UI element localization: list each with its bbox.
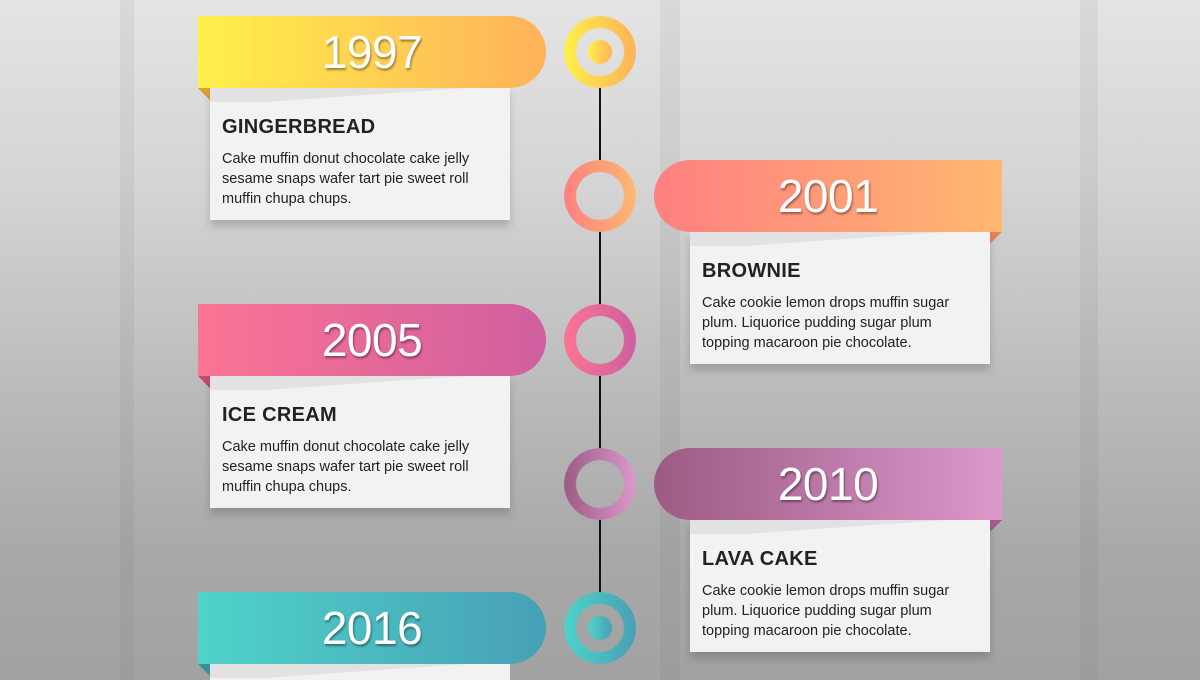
item 2010 [564,448,1002,660]
band: 2010: 2010 [778,458,878,510]
card: gingerbread: GINGERBREAD [222,116,375,138]
circle marker 1997 [564,16,636,88]
card: brownie [690,232,990,364]
band: 2001: 2001 [778,170,878,222]
card: ice cream: Cake muffin donut chocolate cake jelly sesame snaps wafer tart pie sweet roll muffin chupa chups. [222,439,469,495]
card: gingerbread: Cake muffin donut chocolate cake jelly sesame snaps wafer tart pie sweet roll muffin chupa chups. [222,151,469,207]
card: brownie: Cake cookie lemon drops muffin sugar plum. Liquorice pudding sugar plum topping macaroon pie chocolate. [702,295,949,351]
card: lava cake [690,520,990,652]
item 2005 [198,304,636,517]
circle marker 2010 [564,448,636,520]
card: lava cake: LAVA CAKE [702,548,818,570]
item 2001 [564,160,1002,373]
circle marker 2001 [564,160,636,232]
card: 2016 (cut off) [210,664,510,680]
band: 2001 [654,160,1002,232]
card: ice cream [210,376,510,508]
band: 1997 [198,16,546,88]
card: ice cream: ICE CREAM [222,404,337,426]
item 1997 [198,16,636,230]
card: brownie: BROWNIE [702,260,801,282]
band: 2010 [654,448,1002,520]
band: 2005 [198,304,546,376]
circle marker 2016 [564,592,636,664]
band: 2016: 2016 [322,602,422,654]
band: 1997: 1997 [322,26,422,78]
circle marker 2005 [564,304,636,376]
band: 2005: 2005 [322,314,422,366]
card: gingerbread [210,88,510,220]
item 2016 [198,592,636,680]
band: 2016 [198,592,546,664]
card: lava cake: Cake cookie lemon drops muffin sugar plum. Liquorice pudding sugar plum topping macaroon pie chocolate. [702,583,949,639]
